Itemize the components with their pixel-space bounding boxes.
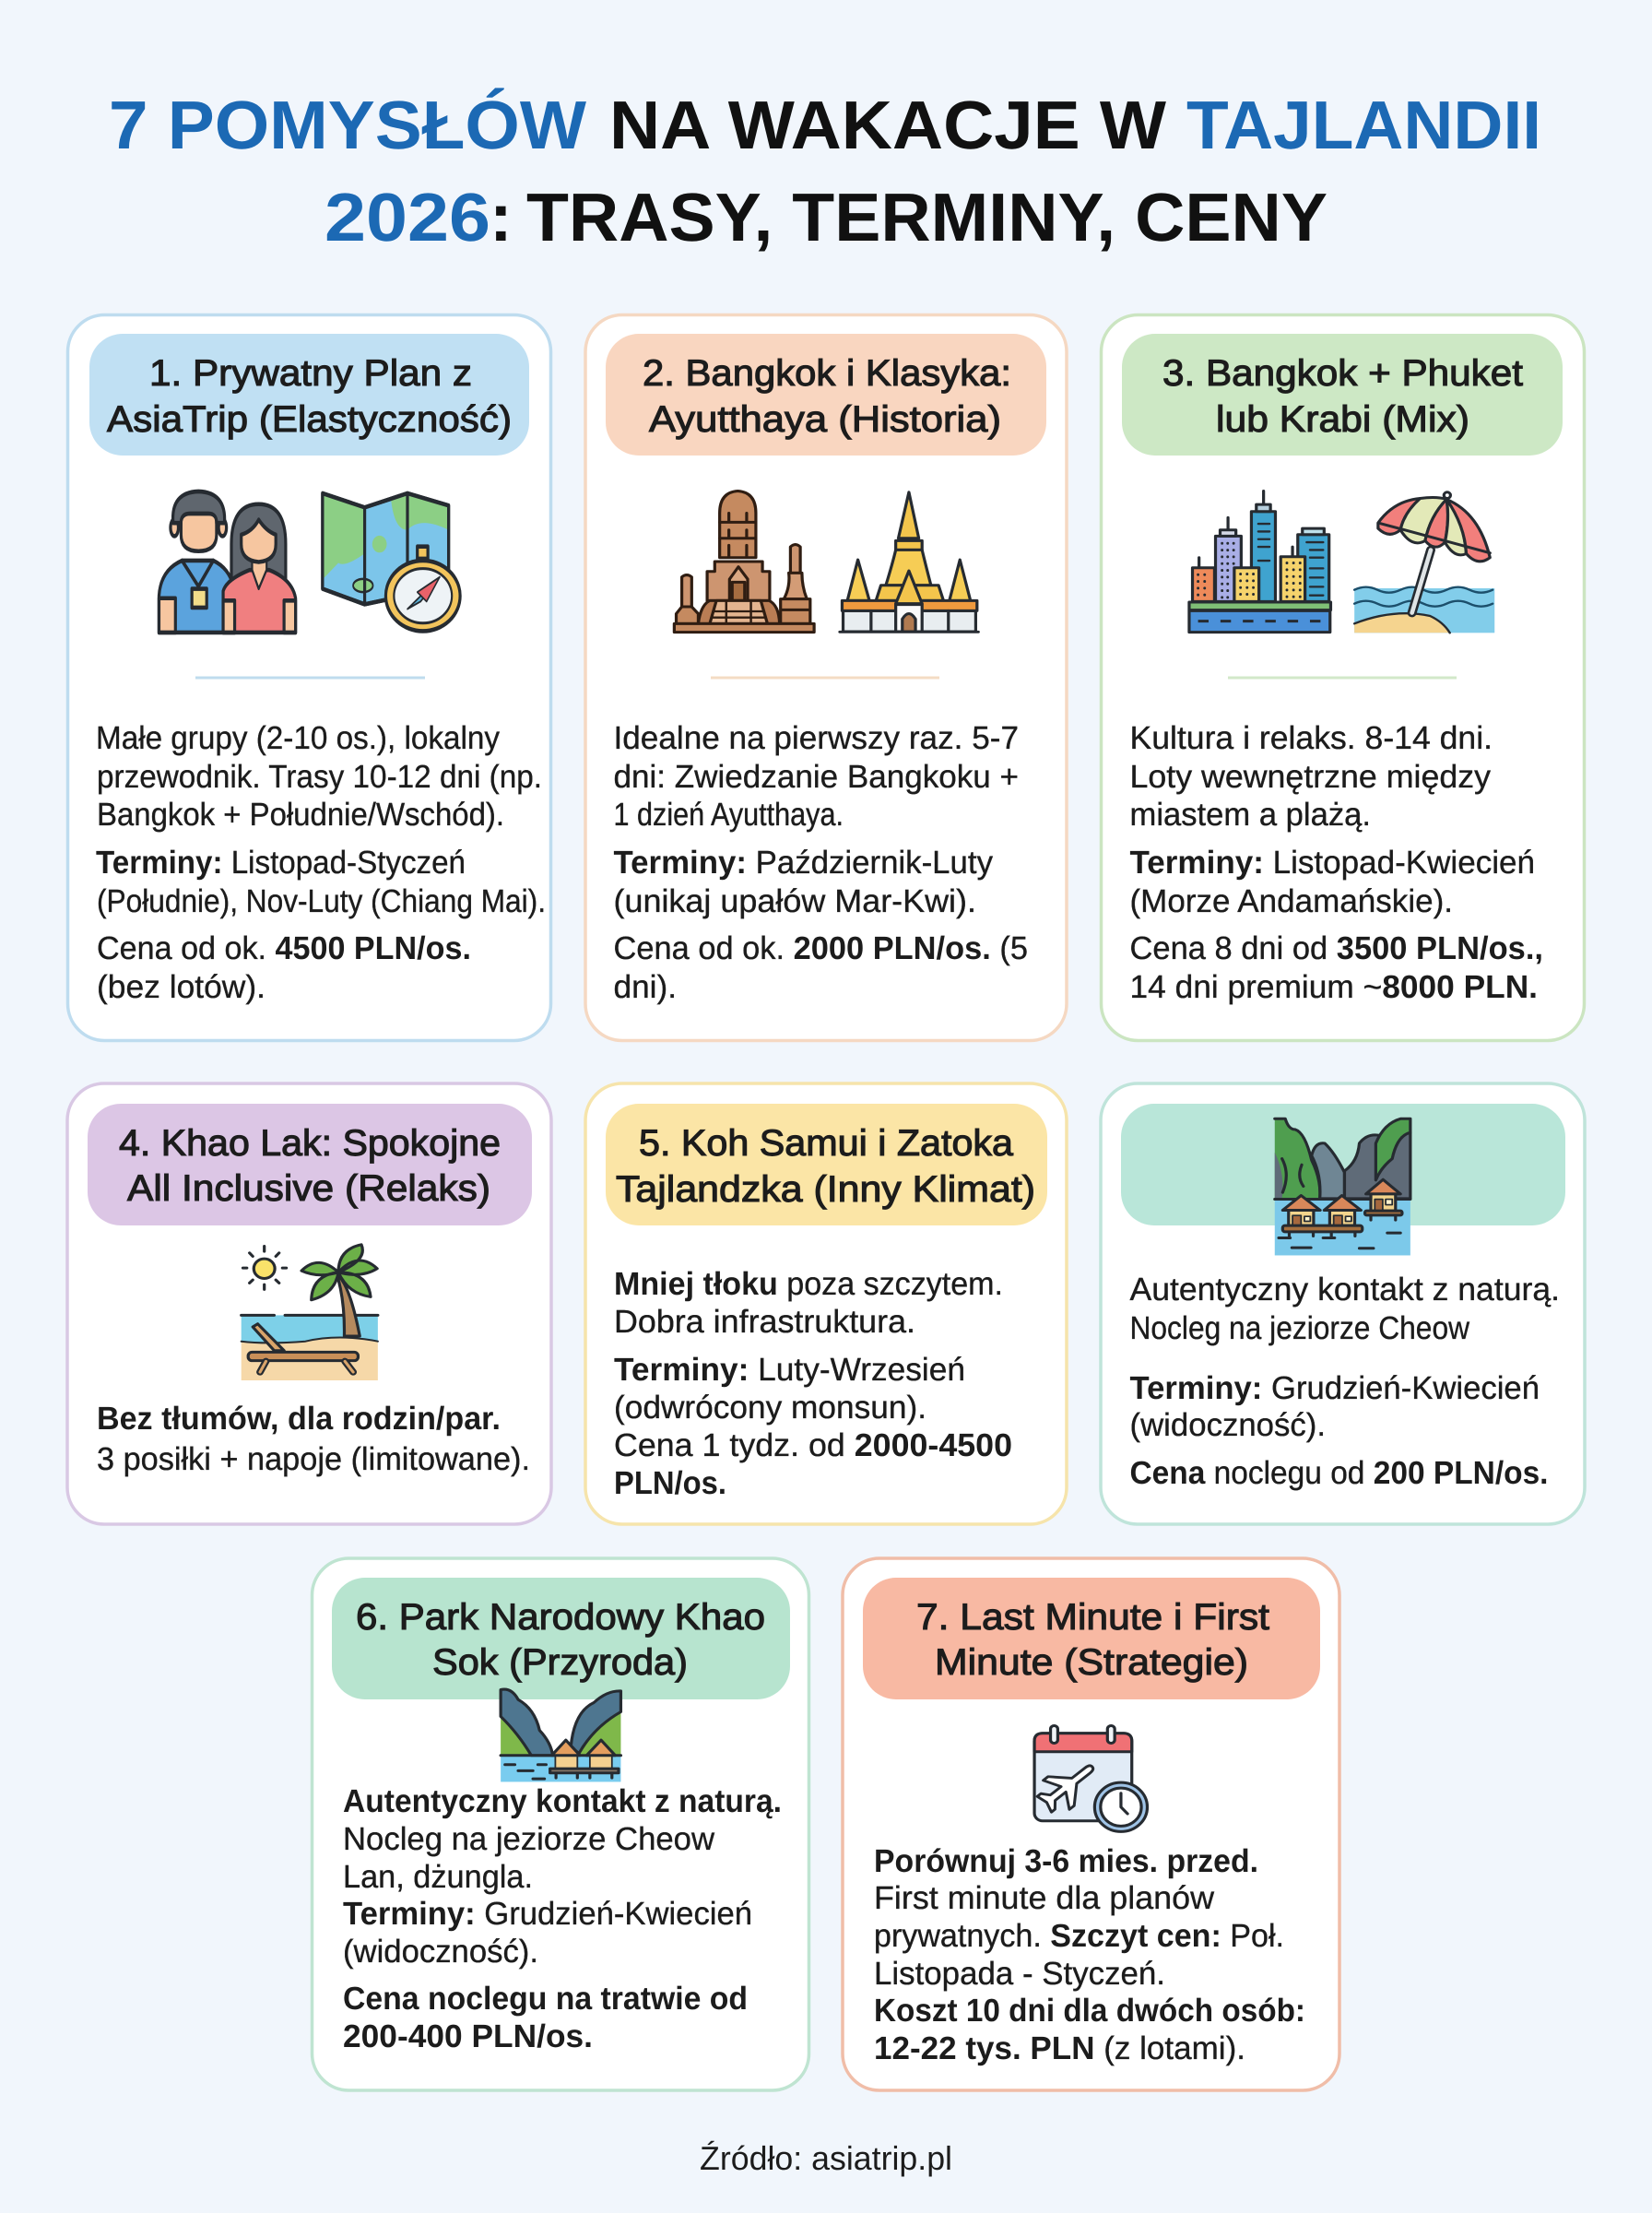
text: card 1 body: [96, 720, 546, 1005]
text: card 6 body: (widoczność).: [343, 1934, 538, 1970]
panel: 1. Prywatny Plan z AsiaTrip: [68, 315, 551, 1040]
heading: card 2: Ayutthaya (Historia): [649, 399, 1001, 440]
text: card 3 body: miastem a plażą.: [1130, 797, 1371, 833]
text: nature card body: Terminy: Grudzień-Kwiecień: [1130, 1370, 1540, 1406]
text: card 2 body: Terminy: Październik-Luty: [614, 845, 993, 881]
title: 2026: [324, 179, 490, 255]
panel: 4. Khao Lak: [67, 1083, 551, 1524]
text: card 7 body: prywatnych. Szczyt cen: Poł.: [874, 1918, 1284, 1954]
text: card 1 body: (Południe), Nov-Luty (Chiang Mai).: [97, 883, 546, 919]
text: card 3 body: (Morze Andamańskie).: [1130, 883, 1453, 919]
text: card 3 body: Cena 8 dni od 3500 PLN/os.,: [1130, 930, 1543, 966]
text: card 7 body: 12-22 tys. PLN (z lotami).: [874, 2030, 1245, 2066]
text: card 1 body: (bez lotów).: [97, 969, 266, 1005]
text: nature card body: Autentyczny kontakt z naturą.: [1130, 1272, 1560, 1308]
text: card 2 body: 1 dzień Ayutthaya.: [614, 797, 844, 833]
text: card 3 body: [1130, 720, 1543, 1005]
text: nature card body: Nocleg na jeziorze Cheow: [1130, 1310, 1470, 1346]
text: card 1 body: Małe grupy (2-10 os.), lokalny: [96, 720, 500, 756]
text: card 3 body: Terminy: Listopad-Kwiecień: [1130, 845, 1535, 881]
heading: card 2: 2. Bangkok i Klasyka:: [643, 353, 1011, 394]
panel: 2. Bangkok i Klasyka: [585, 315, 1067, 1040]
text: card 2 body: [614, 720, 1028, 1005]
text: card 5 body: Dobra infrastruktura.: [614, 1304, 915, 1340]
heading: card 6: 6. Park Narodowy Khao: [356, 1597, 765, 1638]
text: card 5 body: [614, 1266, 1012, 1501]
text: card 1 body: przewodnik. Trasy 10-12 dni (np.: [97, 759, 542, 795]
text: card 3 body: Loty wewnętrzne między: [1130, 759, 1491, 795]
text: card 2 body: (unikaj upałów Mar-Kwi).: [614, 883, 976, 919]
heading: card 4: All Inclusive (Relaks): [127, 1168, 490, 1209]
icon: beach umbrella: [1354, 492, 1494, 633]
heading: card 4: [88, 1104, 532, 1225]
text: card 6 body: Nocleg na jeziorze Cheow: [343, 1821, 715, 1857]
heading: card 5: [606, 1104, 1047, 1225]
heading: card 7: Minute (Strategie): [935, 1642, 1248, 1683]
title: TRASY, TERMINY, CENY: [526, 179, 1328, 255]
text: nature card body: (widoczność).: [1130, 1407, 1326, 1443]
icon: calendar, plane and clock: [1032, 1725, 1148, 1831]
heading: card 1: [89, 334, 529, 456]
heading: card 1: AsiaTrip (Elastyczność): [107, 399, 512, 440]
heading: card 7: [863, 1578, 1320, 1699]
panel: 6. Park Narodowy Khao Sok: [312, 1558, 809, 2090]
text: card 5 body: Cena 1 tydz. od 2000-4500: [614, 1427, 1012, 1463]
heading: card 4: 4. Khao Lak: Spokojne: [119, 1123, 501, 1164]
text: card 5 body: Mniej tłoku poza szczytem.: [614, 1266, 1003, 1302]
text: card 4 body: [97, 1401, 530, 1477]
text: card 5 body: PLN/os.: [614, 1465, 726, 1501]
title: 7 POMYSŁÓW: [109, 87, 586, 163]
panel: 7. Last Minute i First Minute: [843, 1558, 1339, 2090]
title: [109, 87, 1541, 255]
text: nature card body: Cena noclegu od 200 PLN/os.: [1130, 1455, 1549, 1491]
heading: card 6: Sok (Przyroda): [432, 1642, 688, 1683]
heading: card 3: [1122, 334, 1563, 456]
text: card 1 body: Terminy: Listopad-Styczeń: [96, 845, 466, 881]
text: card 5 body: (odwrócony monsun).: [614, 1390, 926, 1426]
text: card 3 body: 14 dni premium ~8000 PLN.: [1130, 969, 1538, 1005]
icon: beach with palm and lounger: [242, 1245, 378, 1380]
text: card 6 body: Lan, dżungla.: [343, 1859, 533, 1895]
panel: unnumbered nature card: [1101, 1083, 1585, 1524]
icon: city skyline: [1189, 491, 1330, 633]
text: card 2 body: dni).: [614, 969, 677, 1005]
heading: card 3: 3. Bangkok + Phuket: [1162, 353, 1523, 394]
text: card 7 body: Koszt 10 dni dla dwóch osób:: [874, 1993, 1305, 2029]
text: card 7 body: Porównuj 3-6 mies. przed.: [874, 1843, 1258, 1879]
title: :: [490, 179, 513, 255]
source line: Źródło: asiatrip.pl: [700, 2139, 952, 2177]
heading: card 5: 5. Koh Samui i Zatoka: [639, 1123, 1014, 1164]
text: card 6 body: [343, 1783, 782, 2054]
text: card 7 body: Listopada - Styczeń.: [874, 1956, 1165, 1992]
text: card 6 body: Autentyczny kontakt z naturą.: [343, 1783, 782, 1819]
icon: karst cliffs with huts: [1275, 1118, 1410, 1255]
text: nature card body: [1130, 1272, 1560, 1491]
heading: card 1: 1. Prywatny Plan z: [149, 353, 472, 394]
text: card 1 body: Bangkok + Południe/Wschód).: [97, 797, 504, 833]
text: card 7 body: [874, 1843, 1305, 2066]
text: card 2 body: Cena od ok. 2000 PLN/os. (5: [614, 930, 1028, 966]
icon: golden stupa: [840, 492, 978, 632]
panel: 3. Bangkok + Phuket lub Krabi: [1101, 315, 1584, 1040]
text: card 4 body: 3 posiłki + napoje (limitowane).: [97, 1441, 530, 1477]
text: card 6 body: 200-400 PLN/os.: [343, 2018, 593, 2054]
icon: Ayutthaya temple: [674, 491, 814, 633]
text: card 3 body: Kultura i relaks. 8-14 dni.: [1130, 720, 1493, 756]
text: card 4 body: Bez tłumów, dla rodzin/par.: [97, 1401, 501, 1437]
text: card 2 body: dni: Zwiedzanie Bangkoku +: [614, 759, 1019, 795]
heading: card 6: [332, 1578, 790, 1699]
heading: card 3: lub Krabi (Mix): [1216, 399, 1469, 440]
icon: guide and traveller: [159, 491, 296, 633]
title: TAJLANDII: [1186, 87, 1541, 163]
panel: 5. Koh Samui: [585, 1083, 1067, 1524]
text: card 5 body: Terminy: Luty-Wrzesień: [614, 1352, 965, 1388]
text: card 2 body: Idealne na pierwszy raz. 5-7: [614, 720, 1019, 756]
heading: card 7: 7. Last Minute i First: [916, 1597, 1269, 1638]
text: card 6 body: Cena noclegu na tratwie od: [343, 1981, 748, 2017]
title: NA WAKACJE W: [609, 87, 1166, 163]
heading band: empty teal: [1121, 1104, 1565, 1225]
icon: Khao Sok cliffs and huts: [501, 1689, 620, 1781]
text: card 6 body: Terminy: Grudzień-Kwiecień: [343, 1896, 752, 1932]
heading: card 5: Tajlandzka (Inny Klimat): [616, 1169, 1035, 1210]
text: card 7 body: First minute dla planów: [874, 1880, 1215, 1916]
text: card 1 body: Cena od ok. 4500 PLN/os.: [97, 930, 471, 966]
icon: map with compass: [323, 493, 460, 631]
heading: card 2: [606, 334, 1046, 456]
